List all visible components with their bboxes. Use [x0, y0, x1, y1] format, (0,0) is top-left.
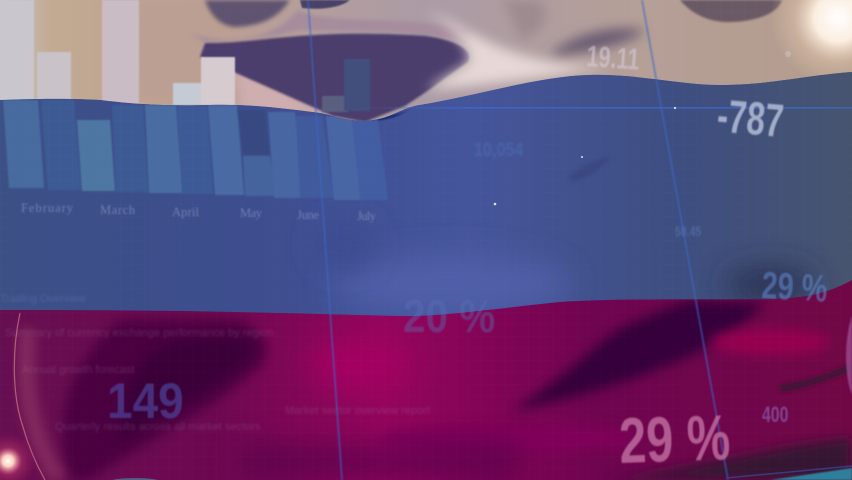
fabric folds on white stripe [135, 0, 852, 122]
figure: 58.45: 58.45 [675, 224, 701, 239]
month axis labels: June [297, 208, 319, 222]
month axis labels: July [357, 209, 377, 223]
month axis labels: March [100, 203, 136, 217]
month axis labels: February [21, 201, 74, 215]
lens arc right edge [846, 315, 852, 395]
figure: 29 % right: 29 % [761, 264, 828, 310]
bar chart upper part [0, 0, 370, 112]
dust specks [494, 51, 791, 205]
bottom edge teal sliver [770, 468, 852, 480]
month axis labels: April [172, 205, 200, 219]
flag: white stripe [0, 0, 852, 130]
faint ticker text lines: Market sector overview report [285, 405, 430, 417]
bottom edge dark line [726, 466, 852, 478]
horizontal crosshair line [0, 107, 852, 109]
lens flare [0, 313, 60, 480]
figure: -787: -787 [715, 91, 786, 147]
figure: 19.11: 19.11 [586, 39, 641, 77]
month axis labels [21, 201, 377, 223]
faint ticker text lines: Summary of currency exchange performance by region [5, 327, 273, 339]
faint ticker text lines: Quarterly results across all market sectors [55, 421, 261, 433]
figure: 29 % lower: 29 % [618, 403, 731, 478]
figure: 20 %: 20 % [403, 292, 495, 343]
figure: 149: 149 [107, 374, 184, 429]
flag: blue stripe [0, 60, 852, 320]
bar chart lower part [3, 100, 388, 200]
faint ticker text lines: Annual growth forecast [22, 364, 135, 376]
fabric folds on red stripe [62, 300, 852, 480]
crosshair lines [308, 0, 728, 480]
bottom edge teal arc [109, 478, 161, 480]
figure: 400: 400 [762, 404, 788, 428]
flag: red stripe [0, 270, 852, 480]
figure: 10.054: 10,054 [474, 139, 524, 160]
month axis labels: May [240, 206, 263, 220]
faint ticker text lines [0, 293, 430, 433]
faint ticker text lines: Trading Overview [0, 293, 86, 305]
